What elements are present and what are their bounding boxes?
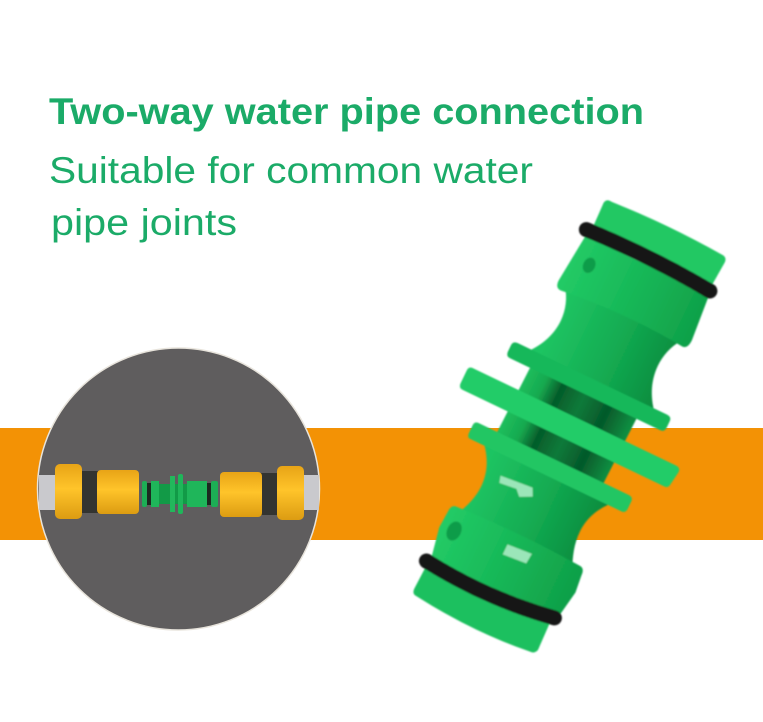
moulded marks (470, 473, 558, 566)
bottom o-ring (425, 557, 554, 624)
right yellow coupling (220, 466, 304, 520)
subtitle: pipe joints (51, 202, 237, 243)
large green two-way connector (368, 175, 763, 679)
inner ribbed core (496, 364, 638, 486)
title: Two-way water pipe connection (49, 91, 644, 132)
upper flange (506, 341, 672, 432)
centre flange (458, 366, 681, 489)
orange band (0, 428, 763, 540)
subtitle (49, 150, 533, 243)
top end cap (590, 197, 728, 290)
lower collar hole (443, 519, 465, 543)
upper neck (527, 283, 688, 413)
left yellow coupling (55, 464, 139, 519)
left hose (39, 475, 57, 510)
bottom end cap (410, 563, 551, 657)
lower flange (467, 421, 633, 513)
upper collar hole (580, 256, 598, 275)
top o-ring (585, 228, 711, 291)
lower collar (424, 502, 588, 625)
upper collar (555, 234, 713, 351)
subtitle: Suitable for common water (49, 150, 533, 191)
small green connector (142, 474, 218, 514)
lower neck (448, 439, 614, 575)
right hose (303, 475, 319, 510)
circle inset: hose connection (38, 348, 320, 630)
